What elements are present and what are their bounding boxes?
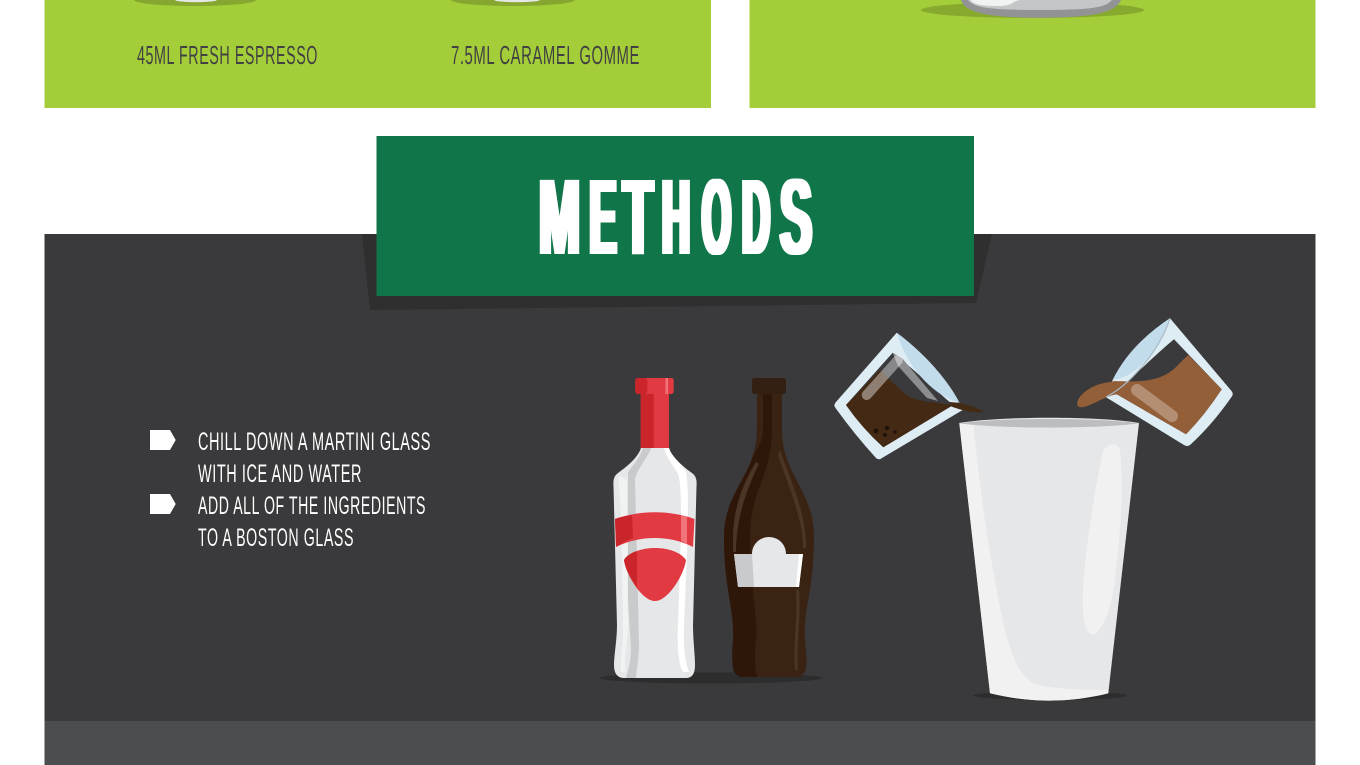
icon: pouring espresso jigger: [834, 333, 984, 459]
heading: methods: T: [623, 156, 653, 277]
heading: methods: M: [539, 156, 580, 277]
icon: gomme cup base: [451, 0, 575, 6]
heading: methods: [376, 136, 974, 296]
heading: methods: H: [662, 156, 690, 277]
icon: bullet 2: [150, 494, 176, 514]
heading: methods: S: [780, 156, 812, 277]
bottle shadow: [600, 672, 822, 684]
panel: methods: [44, 136, 1316, 765]
ingredient label: caramel gomme: 7.5ML CARAMEL GOMME: [451, 40, 640, 70]
icon: pouring caramel jigger: [1077, 318, 1233, 446]
step 1 line 2: WITH ICE AND WATER: [198, 460, 362, 488]
icon: espresso cup base: [134, 0, 256, 6]
icon: plate base: [921, 0, 1144, 18]
heading: methods: O: [702, 156, 731, 277]
method steps: [150, 428, 431, 552]
ingredient label: espresso: 45ML FRESH ESPRESSO: [137, 40, 318, 70]
heading: methods: D: [742, 156, 770, 277]
icon: bullet 1: [150, 430, 176, 450]
bottle band: [615, 512, 694, 547]
panel: ingredients left: [44, 0, 711, 108]
step 2 line 2: TO A BOSTON GLASS: [198, 524, 354, 552]
panel: ingredients right: [750, 0, 1316, 108]
heading shadow: [362, 234, 992, 310]
glass shadow: [973, 691, 1127, 700]
icon: boston glass: [959, 418, 1139, 701]
heading: methods: E: [590, 156, 616, 277]
step 2 line 1: ADD ALL OF THE INGREDIENTS: [198, 492, 426, 520]
icon: dark bottle: [724, 378, 814, 677]
bottle label: [734, 537, 803, 587]
bottle shield label: [624, 548, 686, 601]
step 1 line 1: CHILL DOWN A MARTINI GLASS: [198, 428, 431, 456]
icon: red vodka bottle: [613, 378, 697, 678]
